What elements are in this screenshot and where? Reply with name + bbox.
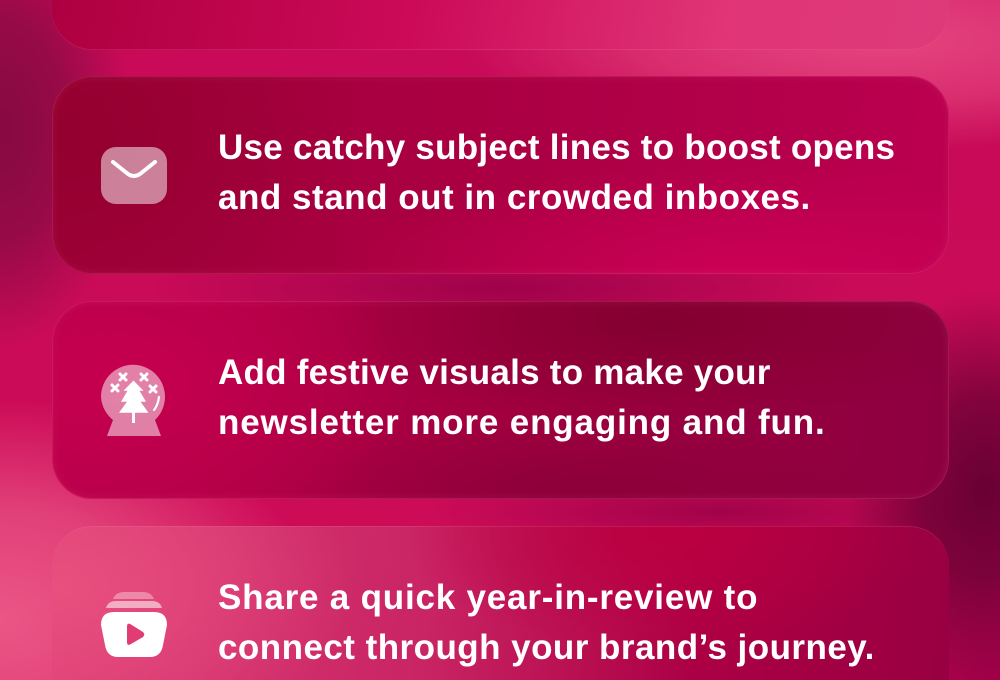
text: festive visuals tip: newsletter more engaging and fun. <box>218 403 826 442</box>
panel: top card (cropped) <box>52 0 949 50</box>
panel: festive visuals card <box>52 301 949 499</box>
icon: envelope <box>101 147 167 204</box>
panel: subject lines card <box>52 76 949 274</box>
text: year-in-review tip: connect through your brand’s journey. <box>218 628 875 667</box>
text: subject lines tip: Use catchy subject lines to boost opens <box>218 128 895 167</box>
text: festive visuals tip: Add festive visuals to make your <box>218 353 771 392</box>
text: subject lines tip <box>218 128 895 217</box>
text: year-in-review tip <box>218 578 875 667</box>
icon: video stack <box>101 592 167 657</box>
panel: year-in-review card <box>52 526 949 680</box>
icon: snow globe with tree <box>101 364 165 436</box>
text: subject lines tip: and stand out in crowded inboxes. <box>218 178 811 217</box>
text: festive visuals tip <box>218 353 826 442</box>
text: year-in-review tip: Share a quick year-in-review to <box>218 578 758 617</box>
